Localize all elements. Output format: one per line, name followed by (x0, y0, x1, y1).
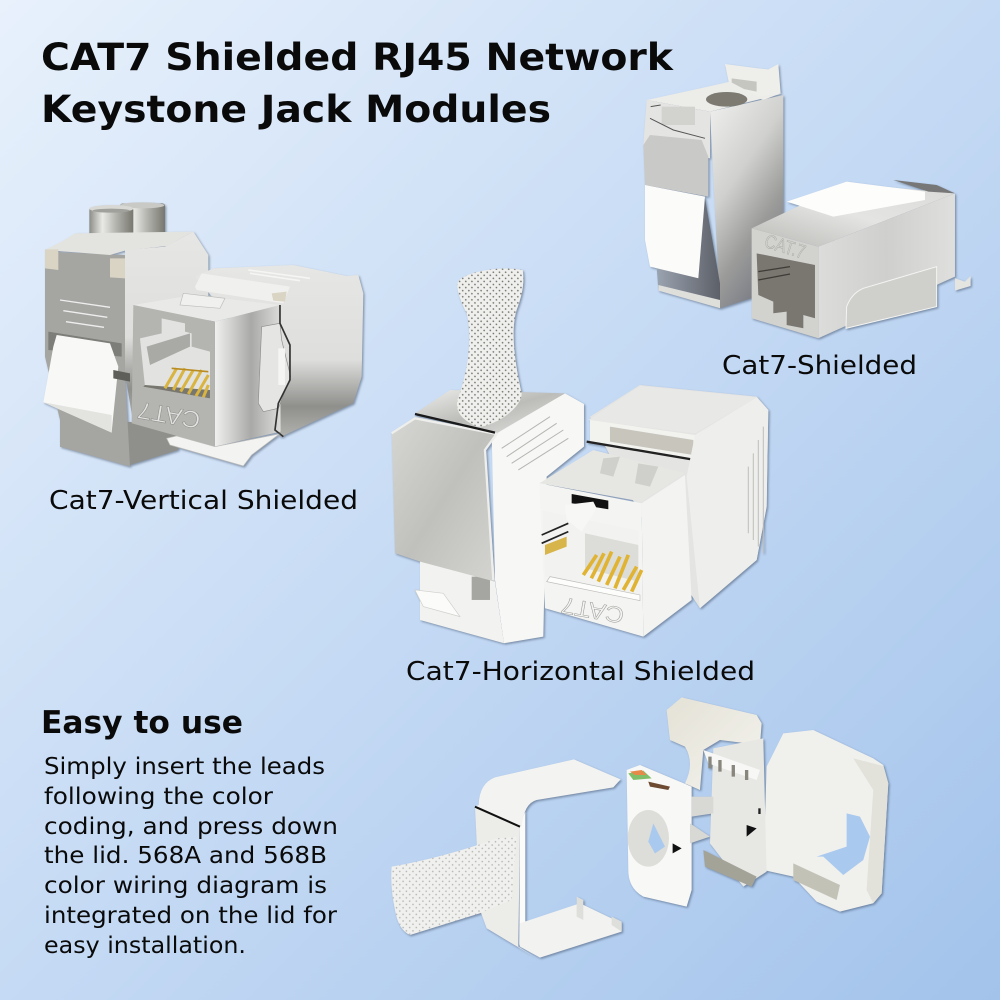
label: Cat7-Horizontal Shielded: Cat7-Horizontal Shielded (406, 657, 755, 687)
title (41, 36, 674, 131)
CAT7 embossed label: CAT7 (559, 592, 626, 629)
description text: the lid. 568A and 568B (44, 841, 327, 869)
lying jack (752, 180, 971, 338)
description text: easy installation. (44, 931, 246, 959)
description text: integrated on the lid for (44, 901, 337, 929)
CAT7 embossed label: CAT7 (136, 396, 203, 433)
rear right body (195, 265, 363, 437)
bottom tab (167, 434, 279, 466)
jack opening (543, 511, 640, 596)
metal braid sleeve (457, 269, 523, 427)
upright module flap (643, 135, 708, 278)
product: Cat7 shielded jacks (643, 64, 971, 338)
label: Cat7-Vertical Shielded: Cat7-Vertical Shielded (49, 486, 358, 516)
title: CAT7 Shielded RJ45 Network (41, 36, 674, 79)
rear right cube (587, 385, 768, 608)
side latch (258, 305, 291, 437)
description text: coding, and press down (44, 812, 338, 840)
product: Cat7 horizontal shielded jack (392, 269, 768, 643)
rear housing body (703, 730, 888, 912)
CAT.7 embossed label: CAT.7 (762, 231, 808, 264)
gold contact pins (165, 368, 208, 397)
description text: following the color (44, 782, 273, 810)
rear housing top (667, 697, 762, 790)
cable cylinders (89, 202, 165, 237)
jack front (539, 450, 692, 637)
rear left cube (392, 390, 584, 643)
gold contact pins (583, 552, 642, 592)
rear body (45, 232, 208, 467)
jack opening (757, 253, 815, 328)
product: Cat7 vertical shielded jack (43, 202, 363, 467)
description text (44, 752, 338, 959)
white lid with wiring colours (627, 765, 713, 907)
metal braid sleeve (391, 837, 517, 935)
white flap (43, 335, 130, 433)
heading: Easy to use: Easy to use (41, 705, 243, 741)
label: Cat7-Shielded: Cat7-Shielded (722, 351, 917, 381)
exploded view of jack (391, 697, 888, 958)
U-shaped metal frame (475, 759, 622, 958)
title: Keystone Jack Modules (41, 88, 551, 131)
upright module (643, 64, 783, 308)
description text: Simply insert the leads (44, 752, 325, 780)
jack front (132, 293, 281, 447)
description text: color wiring diagram is (44, 871, 327, 899)
